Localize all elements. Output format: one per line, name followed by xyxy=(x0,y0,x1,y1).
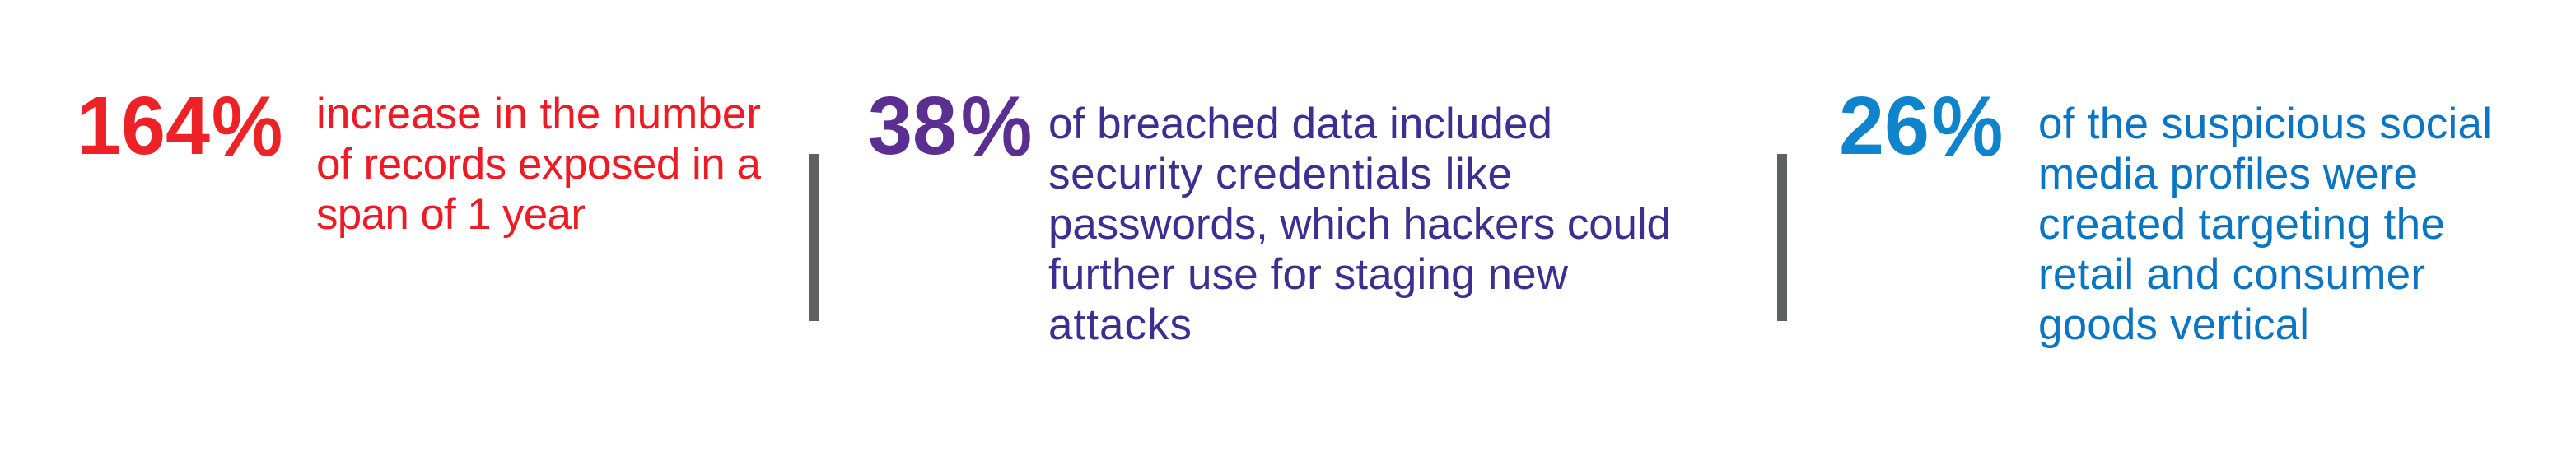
text block: records exposed description: span of 1 year xyxy=(316,190,586,239)
panel: 164% records exposed xyxy=(77,80,762,239)
stat: 26% xyxy=(1839,80,2003,173)
text block: security credentials description: security credentials like xyxy=(1048,150,1512,198)
panel: 38% security credentials xyxy=(868,80,1671,349)
text block: records exposed description: of records exposed in a xyxy=(316,140,762,189)
text block: records exposed description xyxy=(316,90,762,239)
stat: 26%: 26 xyxy=(1839,80,1930,172)
divider: left vertical bar xyxy=(809,154,819,321)
stat: 164%: % xyxy=(212,81,282,173)
stat: 38% xyxy=(868,80,1032,173)
stat: 26%: % xyxy=(1932,81,2003,173)
stat: 38%: 38 xyxy=(868,80,957,172)
stat: 164%: 164 xyxy=(77,80,210,172)
text block: records exposed description: increase in the number xyxy=(316,90,761,138)
text block: suspicious profiles description: goods vertical xyxy=(2038,300,2309,349)
text block: security credentials description xyxy=(1048,100,1671,349)
text block: security credentials description: attacks xyxy=(1048,300,1192,349)
text block: suspicious profiles description: created targeting the xyxy=(2038,200,2445,249)
panel: 26% suspicious social profiles xyxy=(1839,80,2492,349)
text block: suspicious profiles description xyxy=(2038,100,2492,349)
text block: suspicious profiles description: media profiles were xyxy=(2038,150,2418,198)
text block: suspicious profiles description: retail and consumer xyxy=(2038,250,2425,299)
divider: right vertical bar xyxy=(1777,154,1787,321)
text block: suspicious profiles description: of the suspicious social xyxy=(2038,100,2492,148)
stat: 164% xyxy=(77,80,282,173)
text block: security credentials description: passwords, which hackers could xyxy=(1048,200,1671,249)
stat: 38%: % xyxy=(961,81,1032,173)
text block: security credentials description: further use for staging new xyxy=(1048,250,1569,299)
text block: security credentials description: of breached data included xyxy=(1048,100,1552,148)
